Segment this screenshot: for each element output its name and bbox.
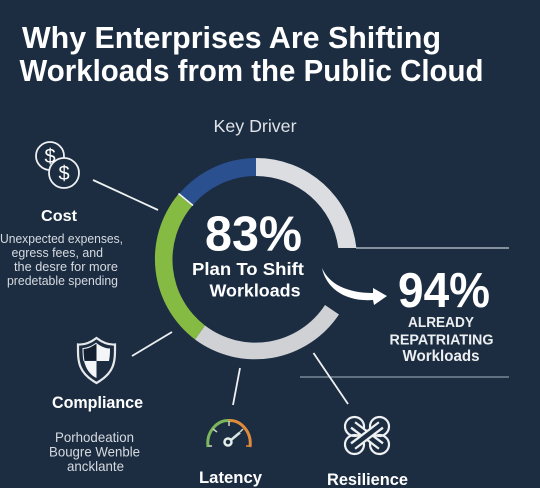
block: cost: predetable spending	[7, 273, 118, 288]
connector: latency	[233, 368, 240, 405]
title	[20, 21, 484, 88]
block: cost: the desre for more	[14, 259, 118, 274]
block: compliance	[49, 393, 143, 474]
title: Workloads from the Public Cloud	[20, 54, 484, 88]
block: compliance: Bougre Wenble	[49, 444, 140, 460]
center stat: 83% plan to shift workloads: Plan To Shift	[192, 259, 304, 279]
divider lines	[300, 248, 509, 377]
center stat: 83% plan to shift workloads: 83%	[205, 208, 302, 262]
stat: 94% already repatriating workloads: ALREADY	[408, 315, 474, 331]
connector: compliance	[132, 332, 172, 356]
stat: 94% already repatriating workloads: 94%	[398, 264, 490, 318]
arrow to 94% stat	[322, 268, 387, 305]
stat: 94% already repatriating workloads: REPATRIATING	[390, 332, 494, 348]
connector: cost	[93, 180, 158, 210]
stat: 94% already repatriating workloads	[390, 264, 494, 365]
block: cost: Unexpected expenses,	[0, 231, 123, 246]
icon: coins: $	[58, 163, 70, 185]
block: cost: egress fees, and	[12, 245, 103, 260]
donut ring chart	[155, 158, 356, 359]
icon: gauge	[208, 420, 250, 447]
block: compliance: Porhodeation	[55, 429, 134, 445]
title: Why Enterprises Are Shifting	[22, 21, 441, 55]
center stat: 83% plan to shift workloads	[192, 208, 304, 300]
center stat: 83% plan to shift workloads: Workloads	[210, 280, 301, 300]
icon: shield	[78, 338, 115, 383]
heading: key driver: Key Driver	[214, 116, 297, 136]
block: compliance: Compliance	[52, 393, 143, 412]
icon: resilience knot	[345, 417, 389, 454]
block: cost: Cost	[41, 208, 78, 225]
icon: coins: $	[44, 146, 56, 168]
connector: resilience	[314, 353, 348, 404]
icon: coins	[36, 142, 79, 188]
block: compliance: ancklante	[67, 458, 124, 474]
label: latency: Latency	[199, 469, 263, 487]
block: cost	[0, 208, 123, 288]
stat: 94% already repatriating workloads: Workloads	[402, 348, 480, 365]
